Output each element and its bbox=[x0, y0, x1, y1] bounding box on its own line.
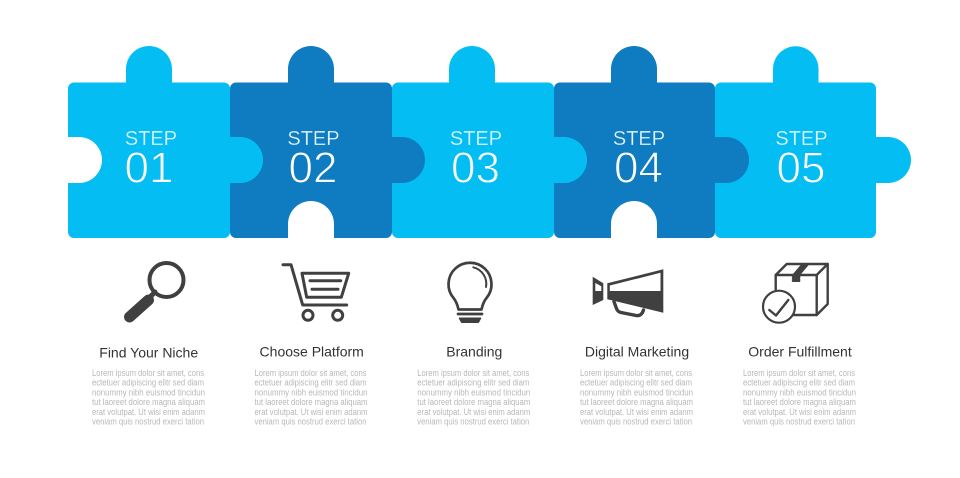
text block 4: veniam quis nostrud exerci tation bbox=[580, 416, 692, 426]
text block 2 bbox=[254, 368, 368, 426]
text block 2: veniam quis nostrud exerci tation bbox=[254, 416, 366, 426]
title: Choose Platform: Choose Platform bbox=[260, 344, 364, 360]
text block 1: tut laoreet dolore magna aliquam bbox=[92, 397, 205, 407]
text block 3: tut laoreet dolore magna aliquam bbox=[417, 397, 530, 407]
step 05 label: 05 bbox=[777, 144, 825, 192]
text block 1: Lorem ipsum dolor sit amet, cons bbox=[92, 368, 204, 378]
puzzle piece 5 bbox=[715, 46, 911, 238]
text block 1: erat volutpat. Ut wisi enim adanm bbox=[92, 407, 205, 417]
text block 5 bbox=[743, 368, 856, 426]
step 03 label: 03 bbox=[451, 144, 500, 192]
step 02 label: 02 bbox=[289, 144, 337, 192]
text block 2: erat volutpat. Ut wisi enim adanm bbox=[254, 407, 368, 417]
text block 5: erat volutpat. Ut wisi enim adanm bbox=[743, 407, 856, 417]
title: Digital Marketing: Digital Marketing bbox=[585, 344, 689, 360]
text block 1: veniam quis nostrud exerci tation bbox=[92, 416, 204, 426]
text block 3: erat volutpat. Ut wisi enim adanm bbox=[417, 407, 530, 417]
text block 3: Lorem ipsum dolor sit amet, cons bbox=[417, 368, 530, 378]
text block 5: veniam quis nostrud exerci tation bbox=[743, 416, 855, 426]
puzzle piece 3 bbox=[392, 46, 587, 238]
text block 4: nonummy nibh euismod tincidun bbox=[580, 387, 693, 397]
text block 3: veniam quis nostrud exerci tation bbox=[417, 416, 529, 426]
puzzle piece 2 bbox=[230, 46, 425, 238]
text block 5: nonummy nibh euismod tincidun bbox=[743, 387, 856, 397]
icon: light bulb bbox=[449, 263, 492, 322]
text block 2: tut laoreet dolore magna aliquam bbox=[254, 397, 368, 407]
text block 1: nonummy nibh euismod tincidun bbox=[92, 387, 205, 397]
text block 3 bbox=[417, 368, 530, 426]
text block 5: ectetuer adipiscing elitr sed diam bbox=[743, 378, 855, 388]
step 02 label: STEP bbox=[287, 128, 340, 150]
icon: shopping cart bbox=[283, 265, 349, 320]
text block 4 bbox=[580, 368, 693, 426]
text block 5: tut laoreet dolore magna aliquam bbox=[743, 397, 856, 407]
text block 4: tut laoreet dolore magna aliquam bbox=[580, 397, 693, 407]
text block 4: ectetuer adipiscing elitr sed diam bbox=[580, 378, 692, 388]
step 04 label: 04 bbox=[614, 144, 663, 192]
puzzle piece 1 bbox=[68, 46, 263, 238]
text block 4: Lorem ipsum dolor sit amet, cons bbox=[580, 368, 692, 378]
text block 5: Lorem ipsum dolor sit amet, cons bbox=[743, 368, 855, 378]
puzzle piece 4 bbox=[554, 46, 749, 238]
text block 2: Lorem ipsum dolor sit amet, cons bbox=[254, 368, 367, 378]
text block 4: erat volutpat. Ut wisi enim adanm bbox=[580, 407, 693, 417]
step 01 label: STEP bbox=[125, 128, 177, 150]
text block 2: nonummy nibh euismod tincidun bbox=[254, 387, 368, 397]
step 01 label: 01 bbox=[125, 144, 173, 192]
text block 1 bbox=[92, 368, 205, 426]
step 05 label: STEP bbox=[775, 128, 828, 150]
text block 3: nonummy nibh euismod tincidun bbox=[417, 387, 530, 397]
icon: megaphone bbox=[593, 269, 663, 316]
step 04 label: STEP bbox=[613, 128, 665, 150]
icon: magnifying glass bbox=[130, 263, 184, 317]
text block 3: ectetuer adipiscing elitr sed diam bbox=[417, 378, 529, 388]
text block 1: ectetuer adipiscing elitr sed diam bbox=[92, 378, 204, 388]
text block 2: ectetuer adipiscing elitr sed diam bbox=[254, 378, 366, 388]
icon: delivered box bbox=[763, 264, 828, 323]
title: Order Fulfillment: Order Fulfillment bbox=[748, 344, 852, 360]
step 03 label: STEP bbox=[450, 128, 502, 150]
title: Branding: Branding bbox=[446, 344, 502, 360]
title: Find Your Niche: Find Your Niche bbox=[99, 345, 198, 361]
